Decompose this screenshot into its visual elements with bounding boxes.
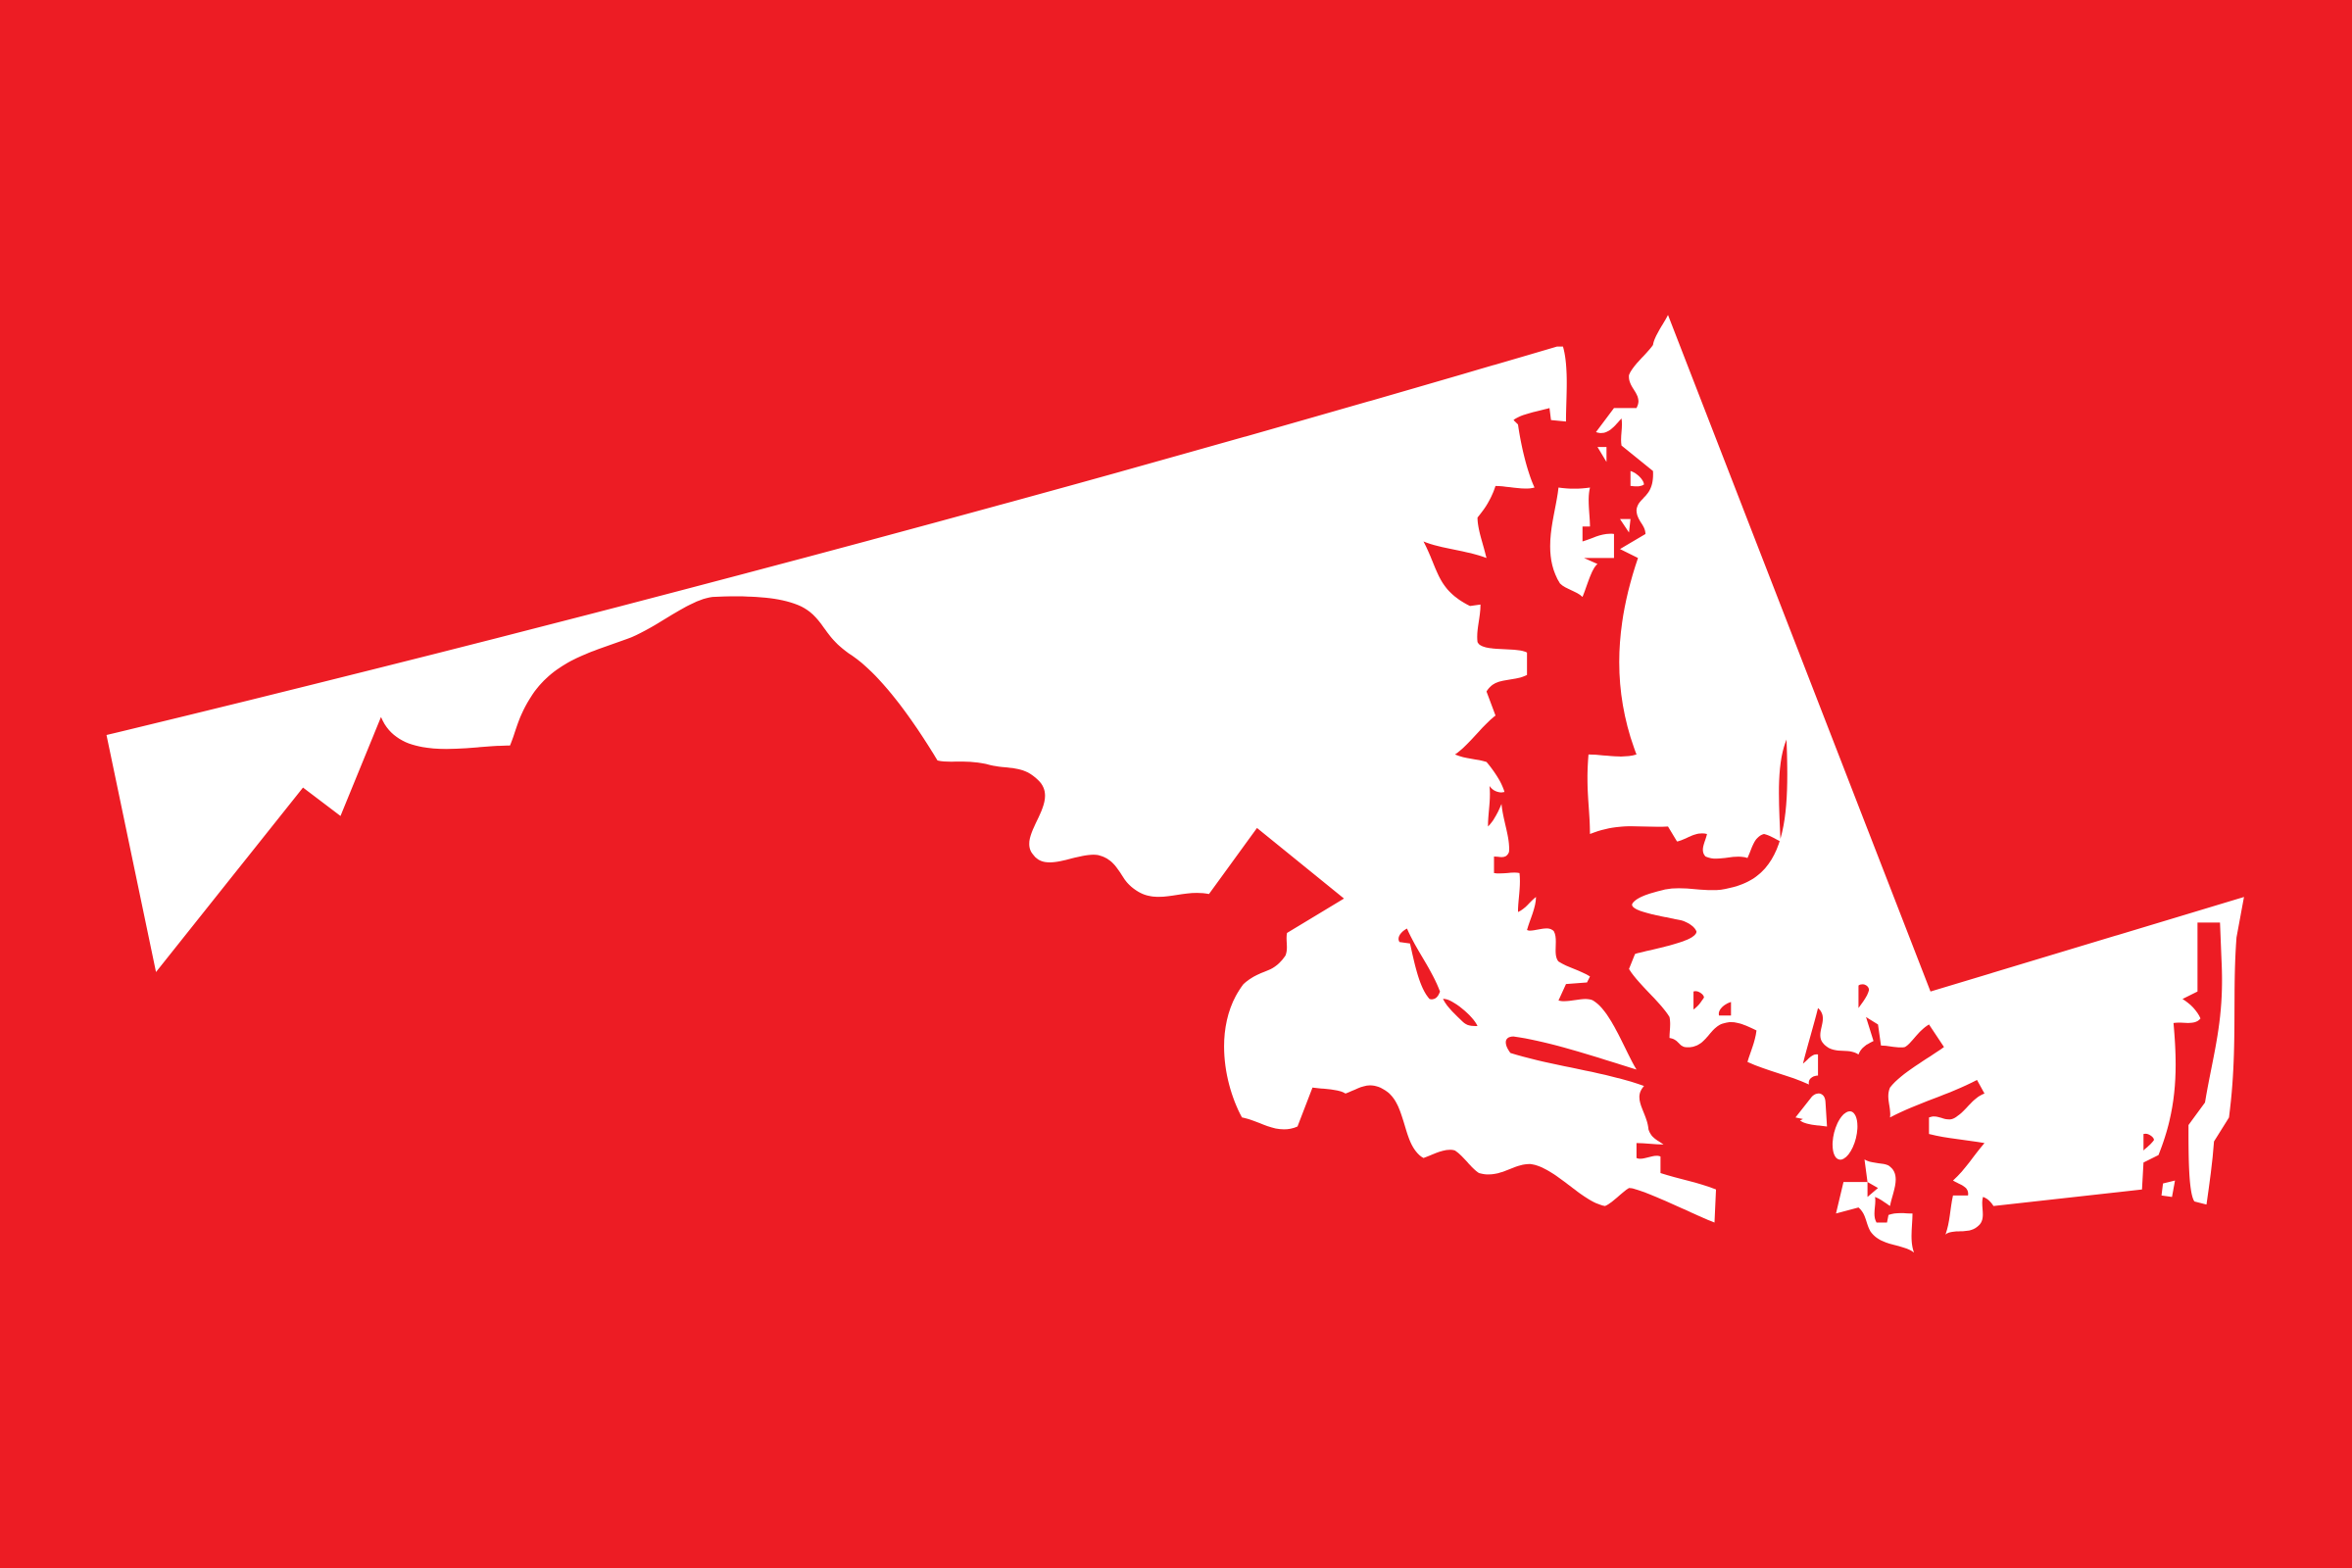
western and central mainland xyxy=(107,347,1716,1222)
map: state silhouette xyxy=(107,315,2244,1252)
eastern shore xyxy=(1588,315,2244,1235)
bay cutout: central island xyxy=(1550,487,1614,597)
bay cutout: southern island group xyxy=(1836,1159,1914,1252)
bay cutout: lower islands xyxy=(1795,1094,1827,1126)
inlets: red islets and notches xyxy=(1398,928,2154,1197)
bay cutout: small islands north xyxy=(1597,447,1644,532)
island: small square east xyxy=(2162,1181,2175,1197)
island: oval xyxy=(1828,1108,1862,1162)
